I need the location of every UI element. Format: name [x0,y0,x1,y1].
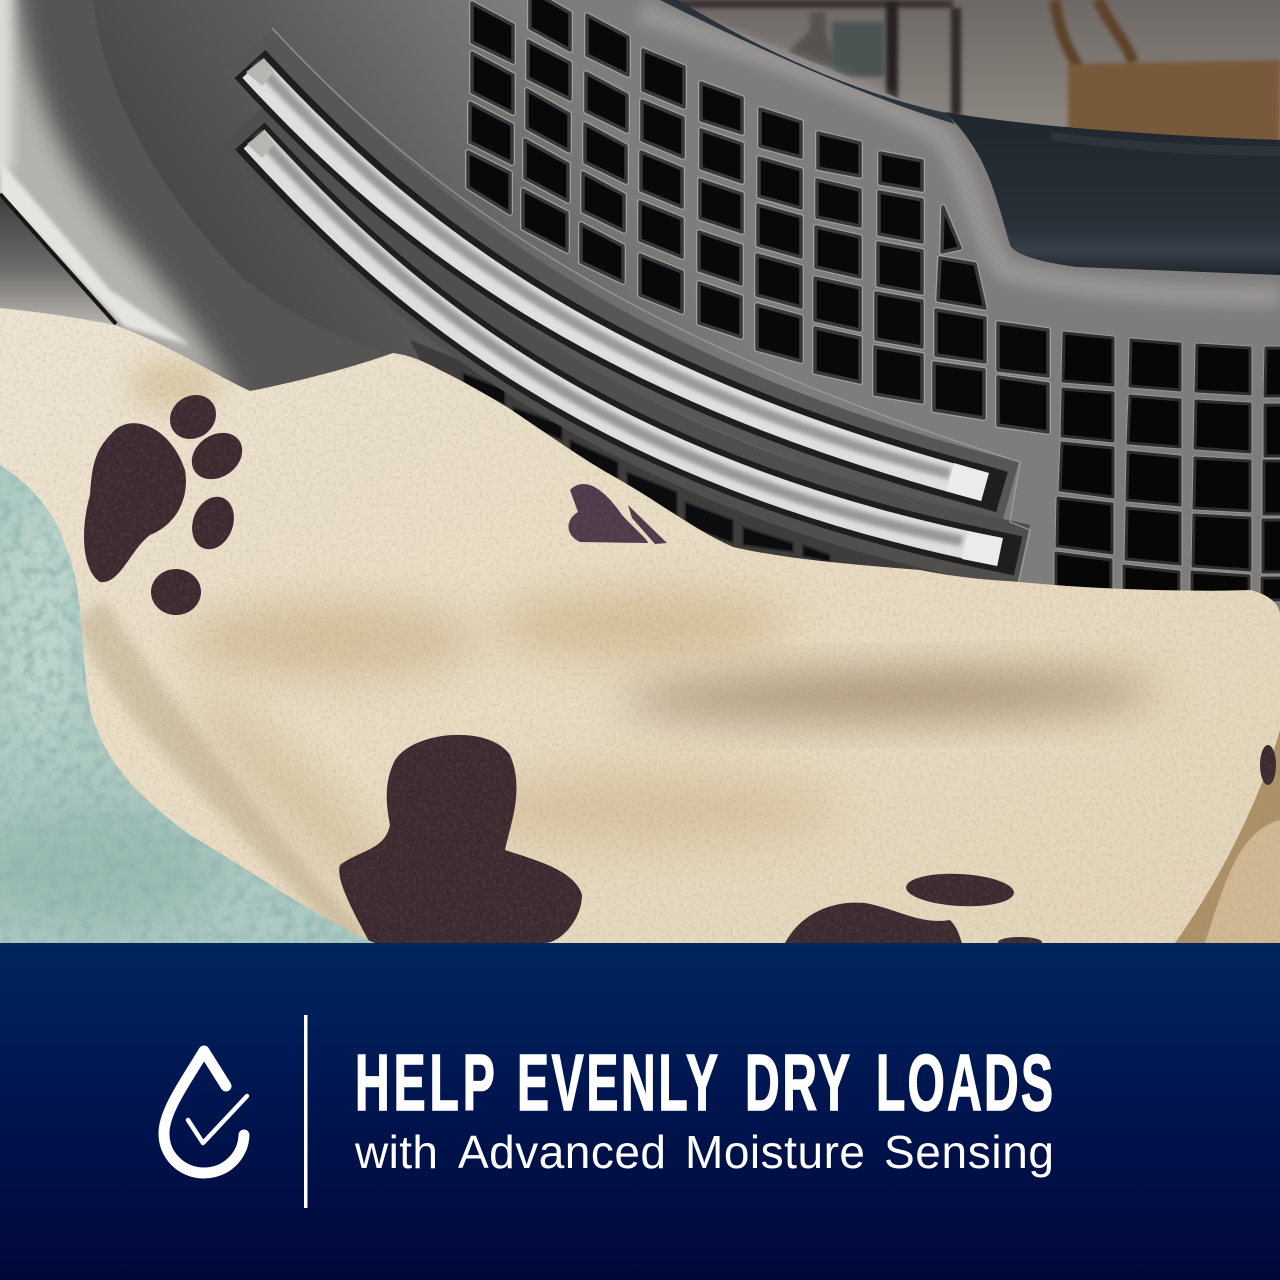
sensor strip: lower [247,131,1018,566]
paw print: mid fold [568,484,667,544]
heading: EVENLY [517,1037,718,1127]
subheading: Advanced [458,1126,666,1178]
icon: water drop with check mark [164,1051,247,1173]
heading: HELP [355,1037,495,1127]
grey vent body [93,0,1280,620]
sensor bezel [246,28,1030,585]
towel texture [0,300,1280,945]
heading: DRY [745,1037,850,1127]
room seen through the door opening [640,0,1280,150]
upper vent holes [468,0,1048,432]
dark door ring [660,0,1280,275]
subheading: with [354,1126,438,1178]
dryer drum background [0,0,1280,620]
navy caption band [0,943,1280,1280]
teal towel [0,460,400,945]
subheading [354,1126,1054,1178]
sensor strip: upper [246,58,1002,501]
subheading: Sensing [884,1126,1054,1178]
cream paw print towel [0,300,1280,947]
heading [355,1037,1053,1127]
outer door silver panel [0,0,400,400]
heading: LOADS [876,1037,1053,1127]
divider [304,1015,308,1208]
lower vent holes [1056,333,1280,600]
paw print: large lower [339,735,582,943]
subheading: Moisture [685,1126,865,1178]
frame highlight along the rim [640,12,1280,296]
paw print: lower right [785,745,1276,947]
ring lip above the grille [660,0,955,124]
towel shading [75,360,1280,943]
moisture sensor strips [246,28,1030,585]
dark area and small vent holes under strips [410,340,1020,590]
paw print: upper left [84,386,251,615]
